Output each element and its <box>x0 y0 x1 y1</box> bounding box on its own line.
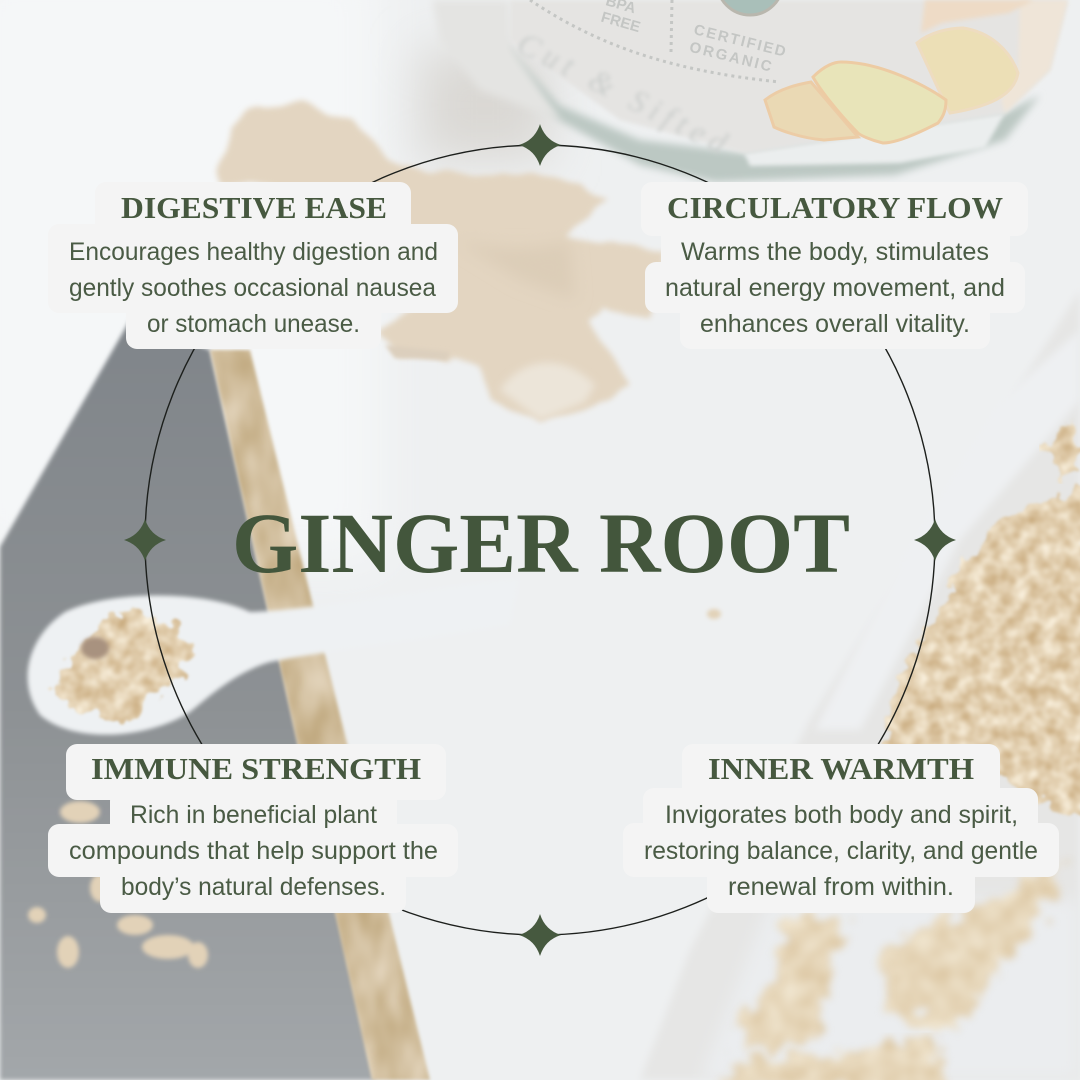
panel: immune strength <box>48 744 458 913</box>
jar text: cut and sifted: Cut & Sifted <box>512 24 734 161</box>
right marble dish <box>640 290 1080 1080</box>
heading: digestive ease: DIGESTIVE EASE <box>121 190 387 225</box>
star: bottom <box>519 914 561 956</box>
jar shadow side <box>432 0 560 120</box>
jar green band <box>504 43 1040 182</box>
text: digestive ease description: Encourages healthy digestion and <box>69 238 438 266</box>
panel: inner warmth <box>623 744 1059 913</box>
text: immune strength description: compounds that help support the <box>69 837 438 865</box>
title: GINGER ROOT <box>232 495 850 591</box>
jar <box>432 0 1068 182</box>
panel: circulatory flow <box>641 182 1028 349</box>
wooden board edge <box>210 350 430 1080</box>
text: circulatory flow description: Warms the body, stimulates <box>681 238 989 266</box>
text: circulatory flow description: enhances overall vitality. <box>700 310 970 338</box>
spoon <box>28 578 520 735</box>
text: immune strength description: body’s natural defenses. <box>121 873 386 901</box>
ginger granules on dish <box>720 418 1080 1080</box>
citrus slice large <box>813 62 946 143</box>
text: circulatory flow description <box>665 238 1005 338</box>
warm shadow behind ginger and jar <box>420 50 550 160</box>
citrus slice right <box>917 28 1018 113</box>
star: right <box>914 519 956 561</box>
heading: inner warmth: INNER WARMTH <box>708 751 974 786</box>
text: immune strength description: Rich in beneficial plant <box>130 801 377 829</box>
text: circulatory flow description: natural energy movement, and <box>665 274 1005 302</box>
text: inner warmth description: restoring balance, clarity, and gentle <box>644 837 1038 865</box>
circle ring <box>145 145 935 935</box>
orange leaf <box>921 0 1034 33</box>
text: inner warmth description <box>644 801 1038 901</box>
text: immune strength description <box>69 801 438 901</box>
text: inner warmth description: renewal from within. <box>728 873 954 901</box>
ginger root <box>220 103 660 425</box>
panel: digestive ease <box>48 182 458 349</box>
jar dotted line <box>530 0 780 82</box>
text: digestive ease description <box>69 238 438 338</box>
jar text: certified organic <box>688 21 788 78</box>
jar lower white rim <box>744 113 1005 166</box>
star: left <box>124 519 166 561</box>
jar label peach panel <box>1001 0 1068 113</box>
star: top <box>519 124 561 166</box>
slate board <box>0 320 375 1080</box>
text: digestive ease description: gently soothes occasional nausea <box>69 274 436 302</box>
top-left pale area <box>0 0 380 560</box>
jar text: BPA free <box>599 0 647 36</box>
scattered granules on board and table <box>28 609 721 968</box>
jar text: certified organic: ORGANIC <box>688 39 773 76</box>
heading: circulatory flow: CIRCULATORY FLOW <box>667 190 1003 225</box>
citrus slice small <box>765 82 858 140</box>
jar label <box>510 0 1068 153</box>
jar label seal <box>717 0 783 15</box>
heading: immune strength: IMMUNE STRENGTH <box>91 751 421 786</box>
text: inner warmth description: Invigorates both body and spirit, <box>665 801 1018 829</box>
jar text: BPA free: FREE <box>599 9 642 36</box>
text: digestive ease description: or stomach unease. <box>147 310 360 338</box>
jar text: certified organic: CERTIFIED <box>692 21 788 61</box>
